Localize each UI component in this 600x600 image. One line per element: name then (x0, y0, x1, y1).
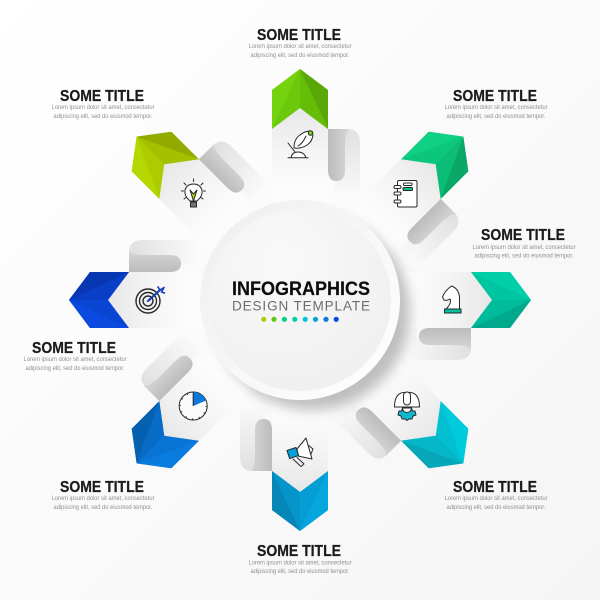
icon: megaphone (287, 438, 313, 466)
text block: top (248, 27, 352, 59)
text block: bottom right: adipiscing elit, sed do eiusmod tempor. (446, 504, 546, 511)
text block: top right: adipiscing elit, sed do eiusmod tempor. (446, 113, 546, 120)
text block: bottom left: adipiscing elit, sed do eiusmod tempor. (54, 504, 153, 511)
text block: left: adipiscing elit, sed do eiusmod tempor. (26, 365, 125, 372)
arm: bottom left royal blue (94, 318, 260, 483)
text block: top left: Lorem ipsum dolor sit amet, consectetur (52, 104, 155, 111)
circle shadow (214, 214, 410, 410)
text block: top right: SOME TITLE (453, 88, 537, 105)
icon: helmet and gear (394, 392, 420, 420)
center circle (200, 200, 400, 400)
text block: bottom: adipiscing elit, sed do eiusmod tempor. (250, 568, 350, 575)
heading: infographics: INFOGRAPHICS (232, 278, 370, 300)
text block: top left (52, 88, 155, 120)
text block: right: Lorem ipsum dolor sit amet, consectetur (472, 244, 576, 251)
text block: bottom: Lorem ipsum dolor sit amet, consectetur (248, 560, 352, 566)
arm: top left lime (117, 94, 282, 260)
text block: bottom right: Lorem ipsum dolor sit amet, consectetur (444, 495, 548, 502)
text block: bottom (248, 543, 352, 575)
text block: top left: SOME TITLE (60, 88, 144, 105)
text block: right: adipiscing elit, sed do eiusmod tempor. (474, 252, 574, 260)
text block: top right: Lorem ipsum dolor sit amet, consectetur (444, 104, 548, 111)
arm: right teal (385, 272, 531, 360)
text block: bottom left: SOME TITLE (60, 479, 144, 496)
text block: left (24, 340, 127, 372)
arm: top right emerald (340, 117, 506, 282)
arm: bottom right cyan (318, 340, 483, 506)
colored dots (261, 317, 339, 322)
text block: bottom right: SOME TITLE (453, 479, 537, 496)
icon: microscope (288, 131, 313, 158)
text block: bottom: SOME TITLE (257, 543, 341, 560)
text block: top: Lorem ipsum dolor sit amet, consectetur (248, 43, 352, 50)
text block: right (472, 227, 576, 260)
icon: light bulb (182, 179, 206, 207)
text block: top right (444, 88, 548, 120)
arm: top green (272, 69, 360, 215)
icon: target (136, 287, 164, 313)
text block: top: SOME TITLE (257, 27, 341, 44)
text block: top left: adipiscing elit, sed do eiusmod tempor. (54, 113, 153, 120)
text block: bottom right (444, 479, 548, 511)
text block: top: adipiscing elit, sed do eiusmod tempor. (250, 52, 350, 59)
icon: chess knight (442, 286, 461, 313)
text block: right: SOME TITLE (481, 227, 565, 244)
text block: left: Lorem ipsum dolor sit amet, consectetur (24, 356, 127, 363)
text block: bottom left: Lorem ipsum dolor sit amet, consectetur (52, 495, 155, 502)
text block: bottom left (52, 479, 155, 511)
icon: clock (179, 392, 207, 420)
arm: bottom blue (240, 385, 328, 531)
text block: left: SOME TITLE (32, 340, 116, 357)
icon: notebook (394, 180, 417, 207)
subheading: design template: DESIGN TEMPLATE (232, 298, 370, 314)
arm: left navy (69, 240, 215, 328)
